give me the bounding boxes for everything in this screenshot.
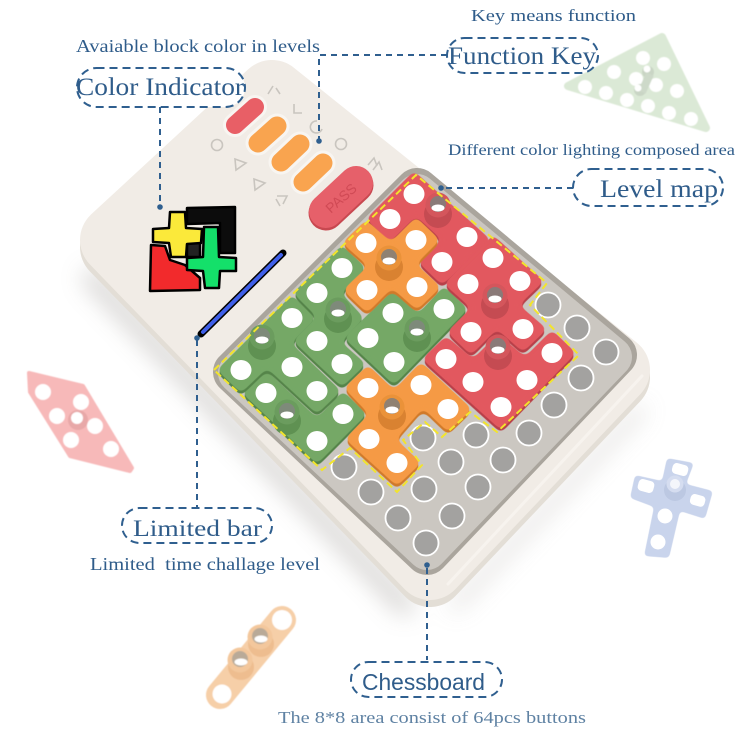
- piece: red top: [365, 170, 492, 289]
- icons: key symbols: [212, 86, 382, 206]
- label: Limited bar: [122, 508, 272, 543]
- device body: [115, 86, 642, 584]
- label: Level map: Level map: [600, 176, 718, 203]
- leader: limited bar: [194, 335, 200, 508]
- label: Color Indicator: Color Indicator: [76, 74, 245, 101]
- piece: orange cross: [341, 216, 442, 317]
- leader: level map: [438, 185, 573, 191]
- limited bar: [201, 253, 283, 334]
- empty chessboard buttons: [332, 292, 618, 556]
- pegs: [248, 192, 512, 435]
- piece: red right: [443, 234, 548, 359]
- piece: green lower: [241, 369, 368, 468]
- label: Limited bar: Limited bar: [133, 516, 262, 541]
- device shadow: [92, 278, 640, 606]
- caption: 8*8 area: The 8*8 area consist of 64pcs buttons: [278, 708, 586, 727]
- caption: available block color: Avaiable block color in levels: [76, 36, 320, 56]
- floating piece: blue cross: [630, 458, 713, 558]
- button: PASS: PASS: [322, 180, 360, 216]
- label: Function Key: Function Key: [448, 43, 597, 70]
- floating piece: peach bar: [212, 610, 292, 704]
- leader: chessboard: [424, 562, 430, 660]
- caption: limited time challenge: Limited time challage level: [90, 554, 320, 574]
- color indicator: [150, 207, 236, 291]
- level map yellow dashed outline: [214, 175, 579, 492]
- leader: color indicator: [157, 107, 163, 210]
- button: orange key 2: [281, 144, 300, 162]
- floating piece: pink parallelogram: [29, 373, 132, 471]
- button: orange key 3: [303, 163, 323, 182]
- caption: different color lighting: Different color lighting composed area: [448, 142, 735, 159]
- caption: key means function: Key means function: [471, 6, 637, 25]
- piece: orange lower: [343, 361, 473, 490]
- piece: green left: [216, 294, 342, 418]
- game tray: [235, 190, 615, 553]
- label: Color Indicator: [76, 68, 245, 107]
- leader: function key: [316, 55, 447, 144]
- piece: green centre: [343, 285, 469, 389]
- label: Function Key: [447, 38, 598, 73]
- button: orange key 1: [258, 126, 277, 143]
- piece: green upper: [292, 244, 367, 391]
- floating piece: pale green triangle: [568, 37, 706, 128]
- label: Chessboard: [351, 662, 502, 697]
- piece: red bottom: [421, 329, 577, 434]
- label: Level map: [573, 169, 723, 206]
- label: Chessboard: Chessboard: [362, 669, 485, 695]
- button: red power key: [235, 107, 255, 125]
